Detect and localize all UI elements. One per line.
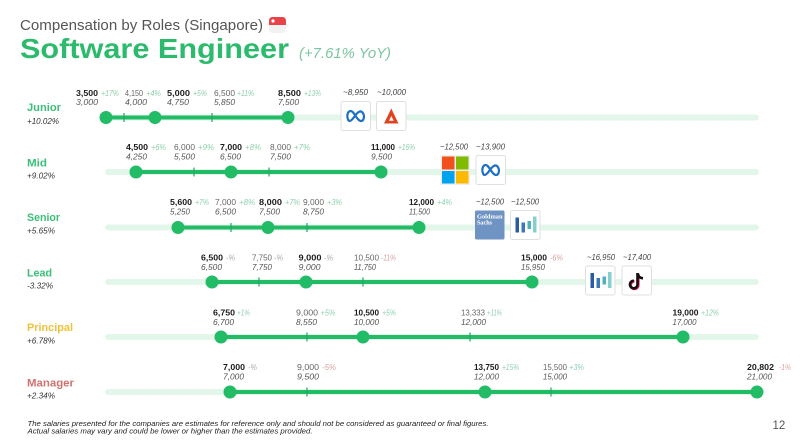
value: 11,000: 9,500 bbox=[371, 152, 392, 162]
value: 10,500: 11,750 bbox=[354, 262, 376, 272]
value: 8,000: +7% bbox=[294, 142, 310, 152]
value: 10,500: 10,500 bbox=[354, 308, 379, 318]
role label: Senior: Senior bbox=[27, 212, 61, 224]
value: 6,500 bbox=[214, 88, 254, 107]
value: 6,500: -% bbox=[226, 252, 235, 262]
value: 13,750: +15% bbox=[502, 362, 519, 372]
value: 20,802: -1% bbox=[779, 362, 791, 372]
value: 4,150: 4,150 bbox=[125, 88, 143, 98]
value: 15,500: 15,500 bbox=[543, 362, 567, 372]
row: Mid bbox=[27, 142, 759, 185]
footnote: The salaries presented for the companies are estimates for reference only and should not be considered as guaranteed or final figures. bbox=[28, 419, 488, 428]
value: 12,000: 12,000 bbox=[409, 197, 434, 207]
value: 13,333: +11% bbox=[487, 308, 502, 318]
role change: Junior: +10.02% bbox=[27, 116, 60, 126]
role label: Mid: Mid bbox=[27, 158, 47, 170]
value: 10,500: -11% bbox=[381, 252, 396, 262]
value: 9,000: 9,000 bbox=[297, 362, 319, 372]
value: 8,000: 7,500 bbox=[259, 206, 280, 216]
value: 9,000 bbox=[298, 252, 333, 272]
value: 7,000: -% bbox=[248, 362, 257, 372]
value: 6,500: 6,500 bbox=[201, 262, 222, 272]
value: 4,500: 4,250 bbox=[126, 152, 147, 162]
value: 8,500 bbox=[278, 88, 321, 107]
value: 13,750 bbox=[474, 362, 519, 382]
value: 5,600: +7% bbox=[195, 197, 209, 207]
value: 9,000: 9,000 bbox=[296, 308, 318, 318]
value: 8,500: 7,500 bbox=[278, 97, 299, 107]
role change: Manager: +2.34% bbox=[27, 390, 56, 400]
value: 5,600 bbox=[170, 197, 209, 216]
value: 13,333 bbox=[461, 308, 502, 327]
value: 20,802: 21,000 bbox=[746, 372, 772, 382]
role label: Junior: Junior bbox=[27, 102, 62, 114]
value: 19,000 bbox=[672, 308, 719, 327]
role change: Principal: +6.78% bbox=[27, 336, 56, 346]
icon: bar logo bbox=[510, 210, 540, 240]
value: 9,000: 9,000 bbox=[298, 262, 321, 272]
value: 10,500: +5% bbox=[382, 308, 396, 318]
row: Manager bbox=[27, 362, 791, 400]
value: 6,750 bbox=[213, 308, 250, 327]
value: 13,333: 12,000 bbox=[461, 317, 486, 327]
value: 9,000: +5% bbox=[320, 308, 336, 318]
role label: Manager: Manager bbox=[27, 378, 75, 390]
salary track: Lead bbox=[105, 276, 759, 288]
value: 7,750: 7,750 bbox=[252, 262, 272, 272]
value: 13,750: 13,750 bbox=[474, 362, 499, 372]
value: 7,000 bbox=[223, 362, 257, 382]
icon: Goldman Sachs logo: Sachs bbox=[477, 220, 493, 226]
company estimate: ~16,950: ~16,950 bbox=[587, 252, 615, 262]
value: 12,000: +4% bbox=[437, 197, 452, 207]
value: 6,500: 6,500 bbox=[214, 88, 235, 98]
value: 4,150: 4,000 bbox=[125, 97, 147, 107]
value: 10,500: 10,000 bbox=[354, 317, 379, 327]
value: 15,000: -6% bbox=[550, 252, 563, 262]
value: 8,500: 8,500 bbox=[278, 88, 301, 98]
role label: Principal: Principal bbox=[27, 322, 73, 334]
value: 9,000: 8,750 bbox=[303, 206, 324, 216]
company estimate: ~13,900: ~13,900 bbox=[476, 142, 505, 152]
value: 7,750 bbox=[252, 252, 283, 272]
value: 8,000 bbox=[259, 197, 300, 216]
value: 12,000 bbox=[409, 197, 452, 216]
value: 8,000: 7,500 bbox=[270, 152, 291, 162]
value: 15,500 bbox=[543, 362, 584, 382]
value: 11,000 bbox=[371, 142, 415, 162]
icon: TikTok logo bbox=[622, 266, 652, 295]
value: 4,150 bbox=[125, 88, 161, 107]
value: 5,000: 4,750 bbox=[167, 97, 189, 107]
value: 20,802: 20,802 bbox=[747, 362, 774, 372]
company estimate: ~8,950: ~8,950 bbox=[343, 87, 368, 97]
value: 7,000: 6,500 bbox=[215, 206, 236, 216]
value: 11,000: 11,000 bbox=[371, 142, 395, 152]
title: software engineer: Software Engineer bbox=[20, 33, 289, 64]
value: 7,000: +8% bbox=[245, 142, 261, 152]
value: 5,000 bbox=[167, 88, 207, 107]
value: 8,000: +7% bbox=[285, 197, 300, 207]
value: 4,150: +4% bbox=[146, 88, 161, 98]
value: 7,000 bbox=[220, 142, 261, 162]
value: 5,600: 5,250 bbox=[170, 206, 190, 216]
value: 7,750: 7,750 bbox=[252, 252, 272, 262]
value: 9,000: 9,500 bbox=[297, 372, 319, 382]
row: Lead bbox=[27, 252, 759, 295]
value: 8,000 bbox=[270, 142, 310, 162]
value: 9,000 bbox=[296, 308, 336, 327]
role change: Lead: -3.32% bbox=[27, 280, 54, 290]
value: 5,000: 5,000 bbox=[167, 88, 190, 98]
value: 5,600: 5,600 bbox=[170, 197, 192, 207]
value: 4,500: 4,500 bbox=[126, 142, 148, 152]
salary track: Junior bbox=[100, 111, 759, 124]
value: 10,500: 10,500 bbox=[354, 252, 379, 262]
value: 9,000 bbox=[297, 362, 336, 382]
value: 9,000: +3% bbox=[327, 197, 342, 207]
value: 8,000: 8,000 bbox=[270, 142, 291, 152]
value: 8,500: +13% bbox=[304, 88, 321, 98]
value: 3,500: +17% bbox=[101, 88, 119, 98]
value: 7,000: 7,000 bbox=[220, 142, 242, 152]
value: 8,000: 8,000 bbox=[259, 197, 282, 207]
value: 15,500: 15,000 bbox=[543, 372, 567, 382]
company estimate: ~12,500: ~12,500 bbox=[476, 196, 504, 206]
company estimate: ~12,500: ~12,500 bbox=[440, 142, 468, 152]
value: 4,500 bbox=[126, 142, 166, 162]
value: 9,000: 8,550 bbox=[296, 317, 317, 327]
value: 9,000: 9,000 bbox=[303, 197, 324, 207]
value: 6,750: 6,750 bbox=[213, 308, 235, 318]
value: 15,500: +3% bbox=[569, 362, 584, 372]
icon: Goldman Sachs logo bbox=[475, 210, 504, 240]
salary track: Manager bbox=[105, 386, 764, 398]
company estimate: ~12,500: ~12,500 bbox=[511, 196, 539, 206]
salary track: Senior bbox=[105, 221, 759, 234]
value: 6,500: 6,500 bbox=[201, 252, 223, 262]
value: 6,500: 5,850 bbox=[214, 97, 235, 107]
value: 9,000 bbox=[303, 197, 342, 216]
value: 11,000: +16% bbox=[398, 142, 415, 152]
value: 6,000: 5,500 bbox=[174, 152, 195, 162]
footnote: Actual salaries may vary and could be lower or higher than the estimates provided. bbox=[26, 426, 313, 436]
value: 19,000: +12% bbox=[701, 308, 719, 318]
value: 19,000: 17,000 bbox=[672, 317, 697, 327]
value: 15,000: 15,000 bbox=[521, 252, 547, 262]
row: Junior bbox=[27, 87, 759, 130]
year over year change: (+7.61% YoY) bbox=[299, 45, 391, 62]
value: 3,500: 3,500 bbox=[76, 88, 98, 98]
value: 6,750: +1% bbox=[237, 308, 250, 318]
value: 3,500: 3,000 bbox=[76, 97, 98, 107]
value: 9,000: 9,000 bbox=[298, 252, 322, 262]
value: 7,000: 6,500 bbox=[220, 152, 241, 162]
company estimate: ~10,000: ~10,000 bbox=[377, 87, 406, 97]
company estimate: ~17,400: ~17,400 bbox=[623, 252, 651, 262]
value: 10,500 bbox=[354, 308, 396, 327]
value: 5,000: +5% bbox=[193, 88, 207, 98]
salary track: Mid bbox=[105, 166, 759, 178]
role change: Senior: +5.65% bbox=[27, 226, 56, 236]
icon: Meta logo bbox=[476, 156, 506, 184]
value: 6,000 bbox=[174, 142, 214, 162]
icon: Microsoft logo bbox=[440, 155, 470, 185]
salary track: Principal bbox=[105, 330, 759, 344]
value: 13,750: 12,000 bbox=[474, 372, 499, 382]
value: 15,000: 15,950 bbox=[521, 262, 545, 272]
value: 20,802 bbox=[746, 362, 791, 382]
value: 7,000: 7,000 bbox=[223, 362, 245, 372]
value: 6,000: 6,000 bbox=[174, 142, 195, 152]
value: 9,000: -5% bbox=[322, 362, 336, 372]
row: Senior bbox=[27, 196, 759, 240]
value: 4,500: +6% bbox=[151, 142, 166, 152]
page number: 12 bbox=[772, 420, 785, 432]
icon: Singapore flag bbox=[269, 17, 286, 33]
icon: bar logo bbox=[586, 266, 615, 295]
value: 19,000: 19,000 bbox=[672, 308, 699, 318]
value: 7,000: 7,000 bbox=[215, 197, 236, 207]
value: 6,500: +11% bbox=[237, 88, 254, 98]
role label: Lead: Lead bbox=[27, 268, 52, 280]
icon: Goldman Sachs logo: Goldman bbox=[477, 214, 503, 220]
value: 7,000: +8% bbox=[239, 197, 255, 207]
value: 7,750: -% bbox=[274, 252, 283, 262]
value: 9,000: -% bbox=[324, 252, 333, 262]
icon: orange delta logo bbox=[376, 102, 406, 130]
role change: Mid: +9.02% bbox=[27, 170, 56, 180]
value: 6,750: 6,700 bbox=[213, 317, 234, 327]
footnote bbox=[26, 419, 489, 436]
value: 6,000: +9% bbox=[198, 142, 214, 152]
value: 7,000 bbox=[215, 197, 255, 216]
value: 3,500 bbox=[76, 88, 119, 107]
icon: Meta logo bbox=[341, 102, 370, 130]
value: 15,000 bbox=[521, 252, 563, 272]
value: 13,333: 13,333 bbox=[461, 308, 485, 318]
value: 12,000: 11,500 bbox=[409, 206, 430, 216]
heading: compensation by roles: Compensation by Roles (Singapore) bbox=[20, 17, 263, 34]
row: Principal bbox=[27, 308, 759, 346]
value: 10,500 bbox=[354, 252, 396, 272]
value: 6,500 bbox=[201, 252, 235, 272]
value: 7,000: 7,000 bbox=[223, 372, 244, 382]
